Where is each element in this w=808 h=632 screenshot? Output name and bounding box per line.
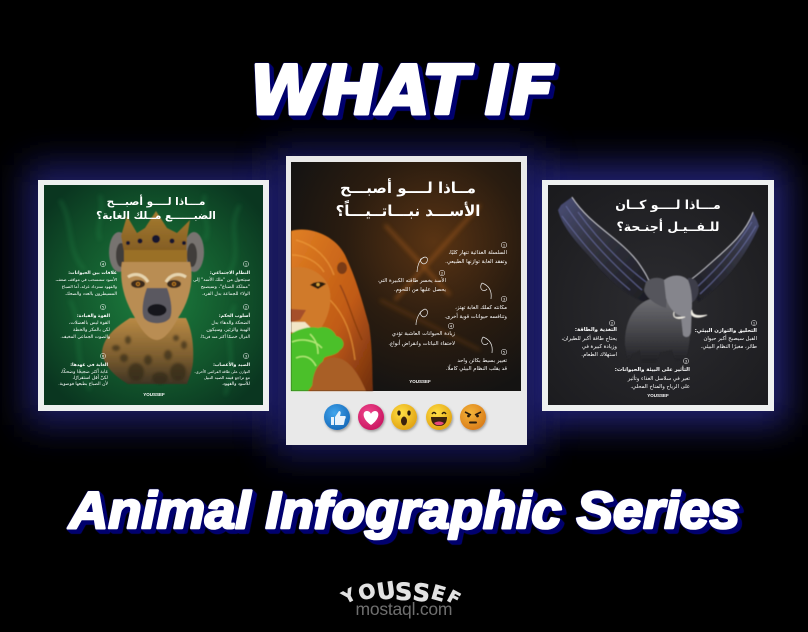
reaction icons <box>324 404 486 430</box>
point 2: التغذية والطاقة: <box>575 327 617 333</box>
logo: YOUSSEF <box>338 578 463 619</box>
right column: points 1-3: "مملكة الضباع"، وسيصبح <box>201 284 250 290</box>
elephant head and trunk <box>664 276 692 337</box>
poster heading <box>615 197 721 234</box>
poster heading: مـــاذا لــــو أصبـــح <box>107 194 205 208</box>
right column: points 1-3: التوازن على طاقة الفرائس الأخرى، <box>194 369 250 374</box>
hyena muzzle <box>143 288 171 323</box>
icon: haha <box>426 404 452 430</box>
poster heading: مــاذا لــــو أصبـــح <box>340 178 476 197</box>
point 1: 1 <box>753 322 755 326</box>
right column: points 1-3: النظام الاجتماعي: <box>210 271 250 276</box>
poster frame <box>38 180 269 411</box>
fact 5: قد يقلب النظام البيئي كاملًا. <box>446 364 507 372</box>
logo: YOUSSEF: E <box>429 580 448 607</box>
icon: angry <box>460 404 486 430</box>
left column: points 4-6: لكنّ أقل استقرارًا، <box>72 374 108 381</box>
hyena ears <box>109 232 129 272</box>
right column: points 1-3: 3 <box>245 354 247 358</box>
poster background <box>44 185 263 405</box>
left column: points 4-6: والفهود ستزداد عزلة، أما الضباع <box>62 283 117 289</box>
point 1: الفيل سيصبح أكبر حيوان <box>703 334 757 342</box>
left column: points 4-6: الأسود ستنسحب في مواقف ضعف، <box>55 277 117 282</box>
logo: YOUSSEF: O <box>355 578 379 606</box>
fact 1: وتفقد الغابة توازنها الطبيعي. <box>445 259 507 265</box>
point 3: تغير في سلاسل الغذاء وتأثير <box>627 374 691 382</box>
right column: points 1-3: الصيد والأعصاب: <box>213 361 250 368</box>
fact 1 <box>445 242 507 265</box>
point 2 <box>561 320 618 358</box>
poster logo: YOUSSEF <box>409 379 431 384</box>
logo: YOUSSEF: U <box>375 578 397 606</box>
lion ear <box>337 262 347 274</box>
arrow 2 to 3 <box>481 283 491 299</box>
poster logo: YOUSSEF <box>647 393 669 398</box>
left column: points 4-6: علاقات بين الحيوانات: <box>68 271 117 276</box>
point 3: على الرياح والمناخ المحلي. <box>630 384 690 390</box>
illustration: crowned hyena <box>102 211 204 384</box>
logo: YOUSSEF: Y <box>338 585 360 609</box>
lion mouth <box>291 322 311 333</box>
poster heading: للـفــيـل أجنـحة؟ <box>616 218 720 234</box>
poster heading <box>336 178 480 220</box>
hyena head <box>121 262 192 340</box>
right column: points 1-3: للأسود والفهود. <box>222 380 250 387</box>
panel: elephant poster <box>542 180 774 411</box>
left column: points 4-6 <box>55 261 117 387</box>
left column: points 4-6: لأن الضباع بطبعها فوضوية. <box>58 380 108 387</box>
poster card <box>286 156 527 445</box>
arrow 1 to 2 <box>417 257 428 272</box>
left wing <box>558 197 652 303</box>
lion paw <box>312 358 366 391</box>
foliage texture <box>60 195 240 395</box>
poster background <box>291 162 521 391</box>
hyena pale brows <box>128 275 186 282</box>
poster logo: YOUSSEF <box>143 392 165 397</box>
title: WHAT IF: WHAT IF <box>249 52 555 131</box>
illustration: winged elephant <box>558 197 759 362</box>
fact 3: وتنافسه حيوانات قوية أخرى. <box>444 312 507 320</box>
point 2: 2 <box>611 322 613 326</box>
icon: love <box>358 404 384 430</box>
fact 2 <box>378 270 447 293</box>
light streaks <box>380 205 480 350</box>
left column: points 4-6: القوة والقيادة: <box>77 314 110 319</box>
hyena body <box>102 318 193 384</box>
right column: points 1-3: الهيبة والزئير، وسيكون <box>206 327 250 333</box>
right column: points 1-3: سيتحول من "ملك الأسد" إلى <box>193 276 250 283</box>
poster heading: الضبــــــع مــلك الغابة؟ <box>96 210 216 222</box>
fact 5: 5 <box>503 350 505 354</box>
point 2: يحتاج طاقة أكبر للطيران، <box>561 334 618 342</box>
poster background <box>548 185 768 405</box>
illustration: lion with lettuce <box>291 230 373 391</box>
left column: points 4-6: لكن بالمكر والخطة <box>73 327 110 333</box>
fact 3 <box>444 296 507 320</box>
left column: points 4-6: 4 <box>102 262 105 266</box>
poster heading <box>96 194 216 222</box>
elephant ear right <box>688 278 699 303</box>
hyena nose <box>148 304 166 316</box>
point 3 <box>615 358 691 390</box>
panel: hyena poster <box>38 180 269 411</box>
hyena eyes <box>131 280 181 288</box>
left column: points 4-6: والصوت الجماعي المخيف. <box>60 335 110 340</box>
poster heading: مـــاذا لــــو كــان <box>615 197 721 212</box>
arrow 4 to 5 <box>482 337 492 353</box>
fact 1: السلسلة الغذائية تنهار كليًا، <box>448 249 507 256</box>
lettuce <box>291 327 343 391</box>
logo: YOUSSEF: S <box>395 578 412 606</box>
gold crown <box>121 211 190 262</box>
right wing <box>690 212 759 302</box>
fact 2: 2 <box>441 272 443 276</box>
arrow 3 to 4 <box>416 309 428 325</box>
right column: points 1-3: أسلوب الحكم: <box>219 312 250 319</box>
left column: points 4-6: الغابة في عهدها: <box>70 363 108 368</box>
poster heading: الأســـد نبـــاتــيـــاً؟ <box>336 200 480 220</box>
hyena fur spots <box>112 335 187 384</box>
right column: points 1-3: الغزال خصمًا أكثر منه فريدًا. <box>200 333 250 340</box>
left column: points 4-6: القوة ليس بالعضلات، <box>69 320 110 326</box>
lion nose <box>291 309 306 322</box>
fact 5: تغيير بسيط بكائن واحد <box>457 357 508 364</box>
icon: like <box>324 404 350 430</box>
right column: points 1-3: الضحكة والدهاء بدل <box>211 320 250 326</box>
point 2: وزيادة كبيرة في <box>582 343 617 350</box>
right column: points 1-3 <box>193 261 250 387</box>
point 3: 3 <box>685 360 687 364</box>
fact 4: 4 <box>450 324 453 328</box>
watermark: mostaql.com: mostaql.com <box>356 599 452 619</box>
point 2: استهلاك الطعام. <box>581 352 617 358</box>
logo: YOUSSEF: S <box>411 578 432 608</box>
fact 2: الأسد يخسر طاقته الكبيرة التي <box>378 277 446 284</box>
poster frame <box>542 180 774 411</box>
fact 5 <box>446 349 508 372</box>
right column: points 1-3: مع تراجع قيمة الصيد النبيل <box>204 375 250 380</box>
fact 4: زيادة الحيوانات العاشبة تؤدي <box>392 331 455 337</box>
left column: points 4-6: 6 <box>102 354 105 358</box>
icon: wow <box>391 404 417 430</box>
subtitle: Animal Infographic Series: Animal Infographic Series <box>67 482 740 540</box>
point 1 <box>695 320 757 350</box>
mane strands <box>292 240 362 360</box>
fact 3: 3 <box>503 298 505 302</box>
right column: points 1-3: 1 <box>245 262 247 266</box>
tusks <box>674 310 707 318</box>
logo: YOUSSEF: F <box>444 587 463 610</box>
fact 1: 1 <box>503 244 505 248</box>
lion mane <box>291 230 373 391</box>
point 1: التحليق والتوازن البيئي: <box>695 328 757 334</box>
fact 4 <box>388 323 455 347</box>
right column: points 1-3: 2 <box>245 306 247 310</box>
left column: points 4-6: غابة أكثر ضجيجًا وضحكًا، <box>61 368 109 375</box>
point 1: طائر، مغيرًا النظام البيئي. <box>701 344 757 350</box>
elephant ear left <box>644 278 668 308</box>
lion face <box>291 267 330 336</box>
right column: points 1-3: الولاء للجماعة بدل الفرد. <box>202 291 250 297</box>
left column: points 4-6: 5 <box>102 306 104 310</box>
fact 3: مكانته كملك الغابة تهتز، <box>455 304 507 311</box>
left column: points 4-6: المسيطرون بالعدد والضحك. <box>65 292 117 297</box>
fact 2: يحصل عليها من اللحوم. <box>394 287 447 293</box>
point 3: التأثير على البيئة والحيوانات: <box>615 365 690 373</box>
elephant body <box>625 298 690 362</box>
lion eye <box>310 282 326 289</box>
fact 4: لاختفاء النباتات وانقراض أنواع. <box>388 339 455 347</box>
panel: lion poster <box>286 156 527 445</box>
